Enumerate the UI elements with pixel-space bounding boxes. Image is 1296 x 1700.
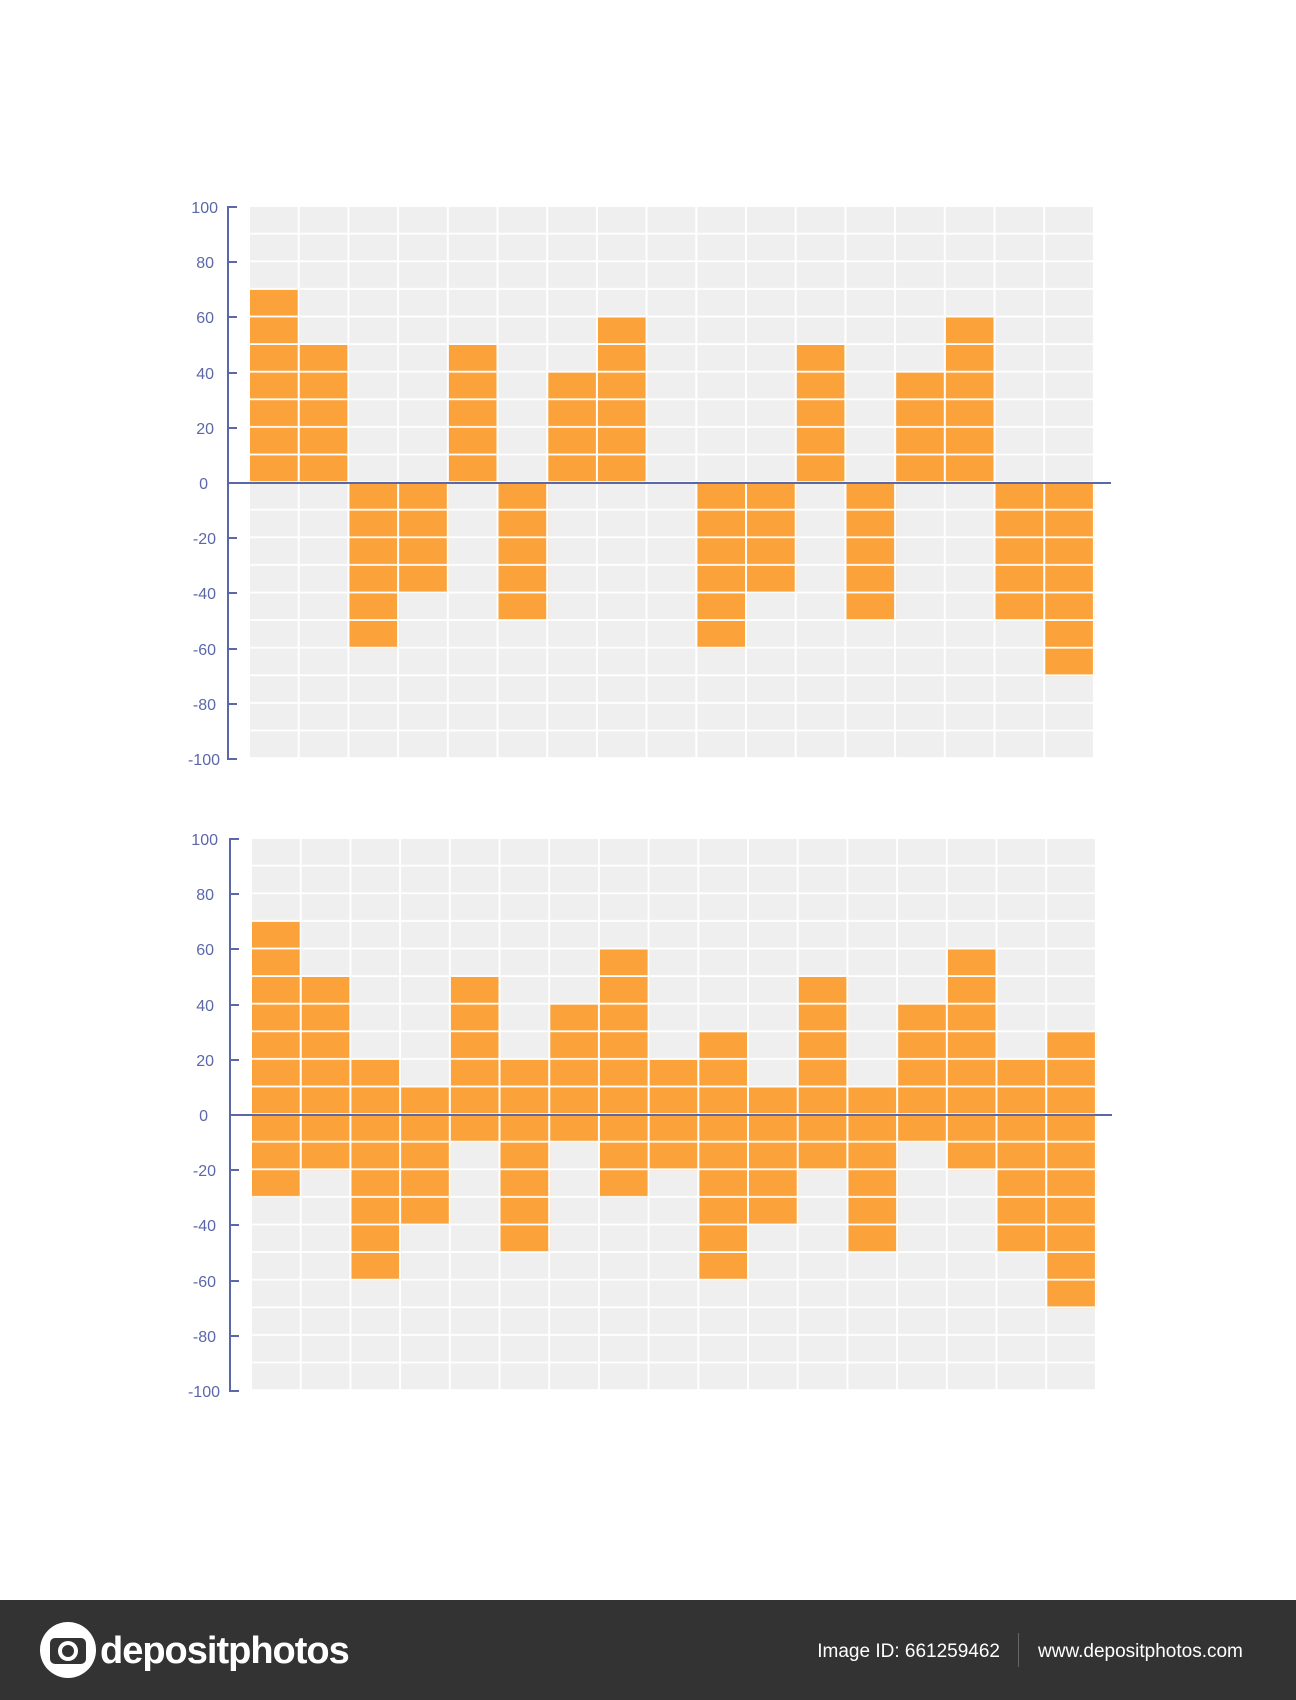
y labels: top chart: 100 xyxy=(191,200,218,217)
axis: bottom chart xyxy=(230,838,1112,1392)
y labels: top chart: -40 xyxy=(193,586,216,603)
y labels: top chart: -100 xyxy=(188,752,220,769)
y labels: bottom chart: -40 xyxy=(193,1218,216,1235)
y labels: bottom chart: -100 xyxy=(188,1384,220,1401)
chart: top column chart xyxy=(250,207,1097,759)
y labels: bottom chart: -80 xyxy=(193,1329,216,1346)
footer bar xyxy=(0,1600,1296,1700)
bars: top chart xyxy=(250,290,1095,676)
y labels: bottom chart: 60 xyxy=(196,942,214,959)
y labels: bottom chart: 100 xyxy=(191,832,218,849)
y labels: top chart xyxy=(188,200,220,769)
y labels: bottom chart: 20 xyxy=(196,1053,214,1070)
logo text: depositphotos xyxy=(100,1630,349,1672)
y labels: top chart: 60 xyxy=(196,310,214,327)
bars: bottom chart xyxy=(252,922,1097,1308)
y labels: top chart: 40 xyxy=(196,366,214,383)
y labels: bottom chart: -60 xyxy=(193,1274,216,1291)
y labels: bottom chart xyxy=(188,832,220,1401)
y labels: top chart: 20 xyxy=(196,421,214,438)
y labels: bottom chart: 40 xyxy=(196,998,214,1015)
chart: bottom range chart xyxy=(252,839,1099,1391)
y labels: top chart: -80 xyxy=(193,697,216,714)
y labels: top chart: -20 xyxy=(193,531,216,548)
image id text: Image ID: 661259462 xyxy=(817,1641,1000,1662)
y labels: top chart: 80 xyxy=(196,255,214,272)
y labels: top chart: 0 xyxy=(199,476,208,493)
y labels: bottom chart: 0 xyxy=(199,1108,208,1125)
y labels: bottom chart: -20 xyxy=(193,1163,216,1180)
icon: camera logo xyxy=(40,1622,96,1678)
y labels: bottom chart: 80 xyxy=(196,887,214,904)
y labels: top chart: -60 xyxy=(193,642,216,659)
axis: top chart xyxy=(228,206,1111,760)
website text: www.depositphotos.com xyxy=(1037,1641,1243,1662)
